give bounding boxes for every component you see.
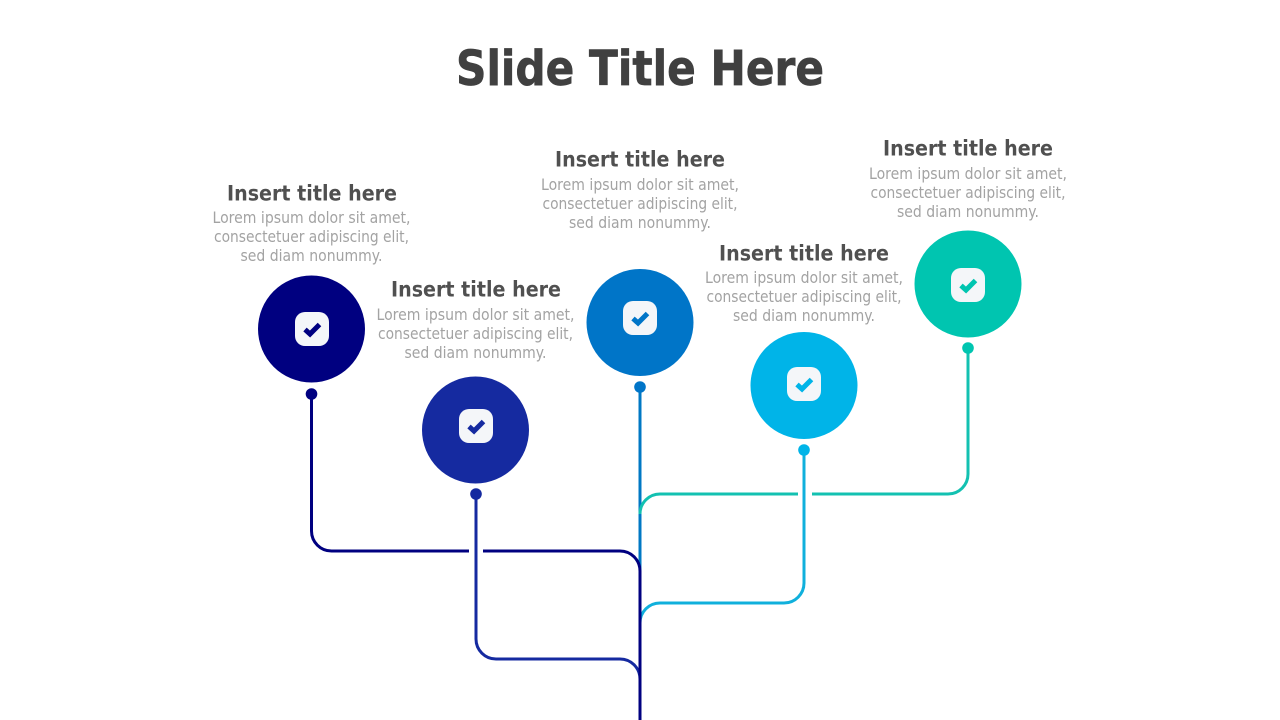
- item 3 body text: consectetuer adipiscing elit,: [542, 194, 738, 213]
- item 2 heading: Insert title here: [391, 278, 561, 302]
- item 2 dot: [470, 488, 482, 500]
- item 4 check icon: [787, 367, 821, 401]
- item 5 check icon: [951, 268, 985, 302]
- item 3 body text: sed diam nonummy.: [569, 213, 711, 232]
- item 2 body text: sed diam nonummy.: [404, 343, 546, 362]
- item 4 body text: sed diam nonummy.: [733, 306, 875, 325]
- item 3 check icon: [623, 301, 657, 335]
- item 5 body text: Lorem ipsum dolor sit amet,: [869, 164, 1067, 183]
- title: Slide Title Here: [456, 41, 824, 97]
- item 1 body text: consectetuer adipiscing elit,: [214, 227, 409, 246]
- item 4 body text: Lorem ipsum dolor sit amet,: [705, 268, 903, 287]
- item 5 body text: [869, 164, 1067, 221]
- item 5 body text: sed diam nonummy.: [897, 202, 1039, 221]
- item 1: [212, 182, 410, 400]
- item 5 heading: Insert title here: [883, 136, 1053, 160]
- item 2 body text: Lorem ipsum dolor sit amet,: [376, 305, 574, 324]
- item 5 body text: consectetuer adipiscing elit,: [870, 183, 1066, 202]
- item 1 dot: [306, 388, 317, 400]
- item 5: [869, 136, 1067, 354]
- item 1 check icon: [295, 312, 329, 346]
- item 5 dot: [962, 342, 974, 354]
- item 2 check icon: [459, 409, 493, 443]
- item 3: [541, 148, 739, 393]
- item 2 body text: consectetuer adipiscing elit,: [378, 324, 573, 343]
- item 4 heading: Insert title here: [719, 242, 889, 266]
- item 1 body text: sed diam nonummy.: [240, 246, 382, 265]
- item 4: [705, 242, 903, 456]
- item 4 body text: consectetuer adipiscing elit,: [706, 287, 902, 306]
- connector: item 1 navy line: [312, 394, 640, 720]
- connector: item 5 teal line: [640, 348, 968, 514]
- item 4 circle: [750, 332, 858, 439]
- connector: item 2 blue line: [476, 494, 640, 679]
- item 1 body text: Lorem ipsum dolor sit amet,: [212, 208, 410, 227]
- item 4 body text: [705, 268, 903, 325]
- item 1 heading: Insert title here: [227, 182, 397, 206]
- item 5 circle: [914, 230, 1022, 338]
- item 1 circle: [258, 276, 365, 382]
- item 1 body text: [212, 208, 410, 265]
- item 2 circle: [422, 376, 529, 484]
- connector: item 3 trunk line: [638, 387, 642, 720]
- item 3 circle: [586, 269, 694, 376]
- item 3 heading: Insert title here: [555, 148, 725, 172]
- item 4 dot: [798, 444, 810, 456]
- item 3 body text: Lorem ipsum dolor sit amet,: [541, 175, 739, 194]
- connector: item 4 cyan line: [640, 450, 804, 623]
- item 2 body text: [376, 305, 574, 362]
- item 3 body text: [541, 175, 739, 232]
- item 3 dot: [634, 381, 646, 393]
- item 2: [376, 278, 574, 500]
